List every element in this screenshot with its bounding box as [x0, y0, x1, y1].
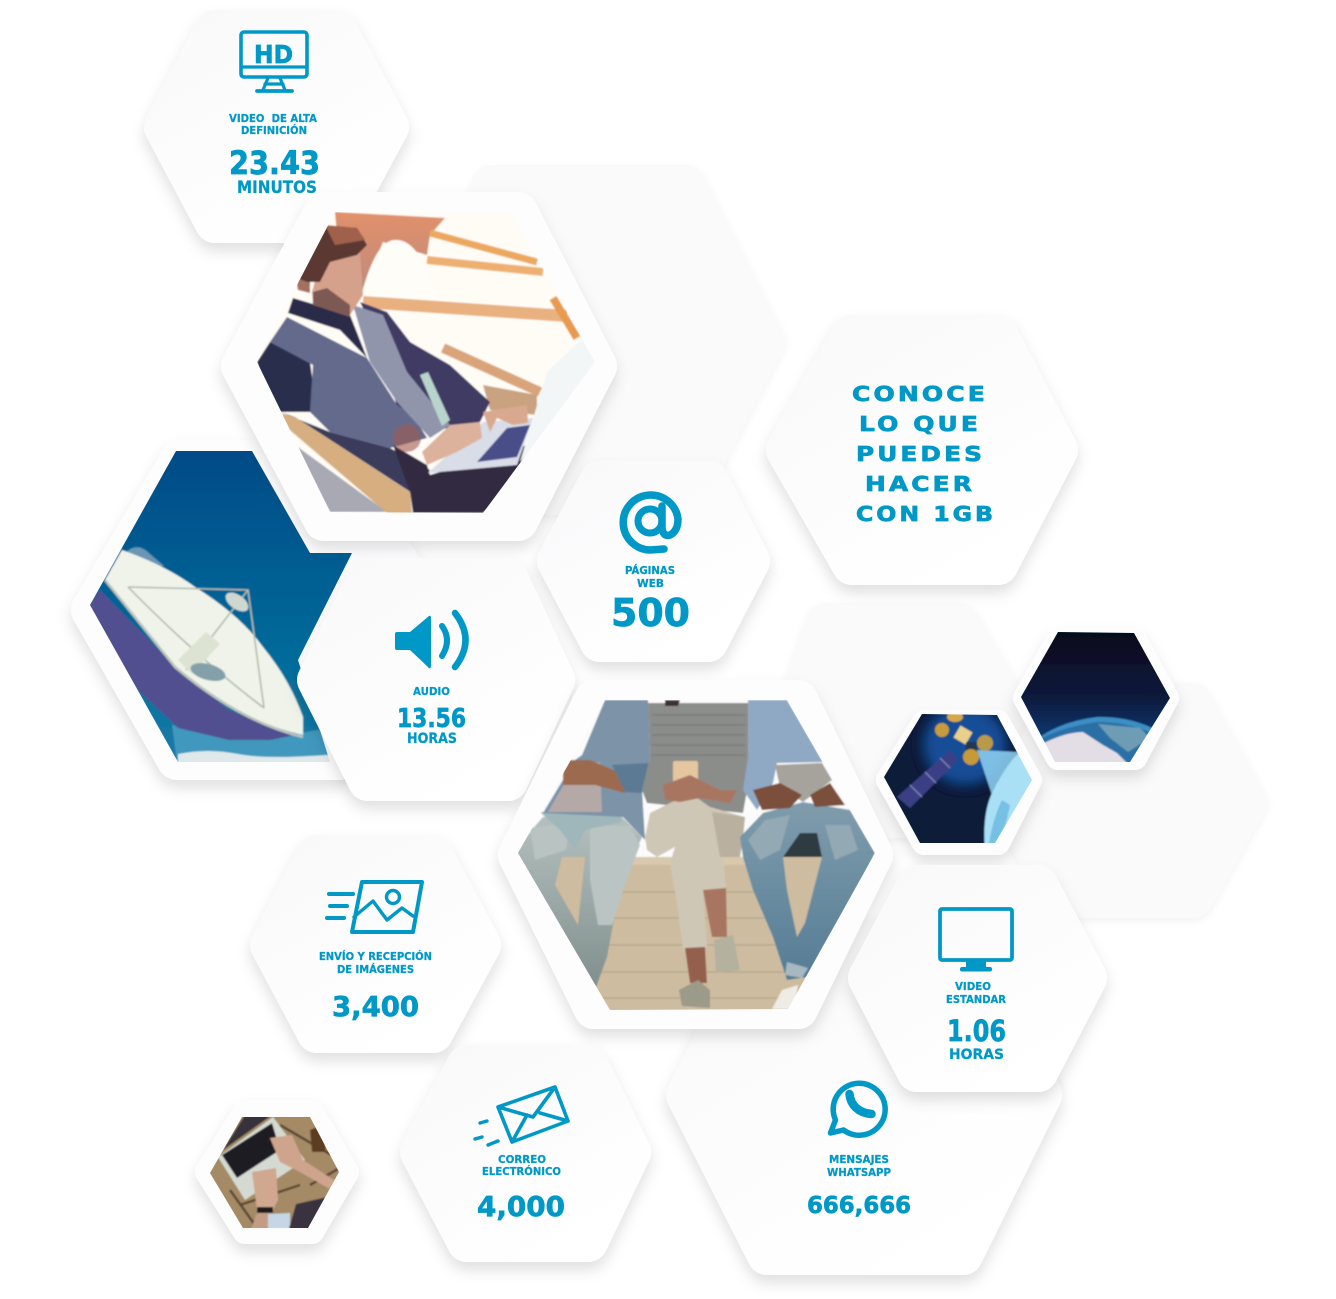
value: 13.56: 13.56 — [397, 704, 466, 734]
label: mensajes: MENSAJES — [829, 1154, 889, 1166]
panel: video estandar — [868, 885, 1087, 1072]
label: correo: CORREO — [498, 1154, 546, 1166]
panel: laptop photo — [205, 1112, 347, 1234]
icon: speaker — [395, 613, 466, 668]
dish frame — [91, 460, 432, 760]
panel base — [557, 480, 750, 642]
unit: minutos: MINUTOS — [237, 178, 317, 197]
panel: whatsapp messages — [686, 938, 1042, 1255]
photo: three people with devices — [510, 695, 885, 1017]
panel base — [270, 855, 481, 1033]
satellite frame — [888, 722, 1030, 843]
laptop frame — [207, 1112, 347, 1232]
label: envio y recepcion: ENVÍO Y RECEPCIÓN — [319, 950, 432, 963]
label: de imagenes: DE IMÁGENES — [337, 963, 414, 976]
panel: people sitting photo — [510, 695, 885, 1017]
photo: satellite dish — [85, 445, 360, 770]
panel: correo electronico — [420, 1065, 631, 1242]
man frame — [241, 212, 597, 521]
panel: man with laptop photo — [241, 205, 600, 521]
icon: whatsapp — [830, 1083, 885, 1135]
photo: satellite and earth — [884, 714, 1032, 843]
label: whatsapp: WHATSAPP — [827, 1167, 891, 1179]
photo: hands on laptop — [210, 1117, 339, 1228]
panel: video HD — [164, 30, 389, 223]
heading: HACER — [865, 472, 975, 496]
background hexagon: behind satellites — [790, 623, 1020, 818]
value: 1.06: 1.06 — [947, 1014, 1006, 1048]
icon: standard monitor — [940, 909, 1012, 972]
panel: earth photo — [1015, 628, 1175, 770]
panel base — [786, 335, 1058, 565]
photo: man with laptop — [250, 205, 600, 520]
label: audio: AUDIO — [413, 686, 450, 698]
unit: horas: HORAS — [949, 1047, 1004, 1063]
value: 4,000: 4,000 — [477, 1190, 565, 1223]
label: paginas: PÁGINAS — [625, 564, 675, 577]
label: web: WEB — [637, 578, 664, 590]
value: 23.43: 23.43 — [229, 144, 320, 182]
photo: earth from space — [1021, 632, 1170, 762]
panel: paginas web — [557, 480, 750, 642]
background hexagon: far right — [1008, 703, 1247, 898]
unit: horas: HORAS — [407, 731, 457, 747]
panel: audio — [317, 578, 555, 781]
panel base — [420, 1065, 631, 1242]
panel: envio de imagenes — [270, 855, 481, 1033]
value: 666,666: 666,666 — [807, 1193, 911, 1219]
panel: conoce lo que puedes hacer con 1GB — [786, 335, 1058, 565]
icon: HD monitor — [241, 32, 307, 91]
background hexagon: upper centre — [420, 185, 765, 495]
panel base — [686, 938, 1042, 1255]
label: estandar: ESTANDAR — [946, 994, 1006, 1006]
heading: CONOCE — [852, 382, 988, 406]
icon: HD monitor: HD — [254, 40, 293, 69]
heading: LO QUE — [859, 412, 981, 436]
icon: envelope — [475, 1087, 568, 1145]
panel base — [317, 578, 555, 781]
label line two: DEFINICIÓN — [241, 124, 307, 137]
icon: at sign — [623, 495, 678, 550]
heading — [852, 382, 996, 526]
value: 3,400: 3,400 — [332, 990, 419, 1023]
heading: PUEDES — [856, 442, 985, 466]
icon: image sending — [327, 882, 422, 932]
label: video: VIDEO — [955, 981, 991, 993]
panel base — [868, 885, 1087, 1072]
heading: CON 1GB — [856, 502, 996, 526]
earth frame — [1025, 640, 1167, 758]
label: video de alta definicion: VIDEO DE ALTA — [229, 113, 318, 125]
value: 500: 500 — [611, 591, 690, 635]
people frame — [518, 700, 873, 1009]
panel: satellite photo — [880, 705, 1040, 850]
label: electronico: ELECTRÓNICO — [482, 1165, 561, 1178]
panel base — [164, 30, 389, 223]
panel: satellite dish photo — [68, 451, 352, 792]
